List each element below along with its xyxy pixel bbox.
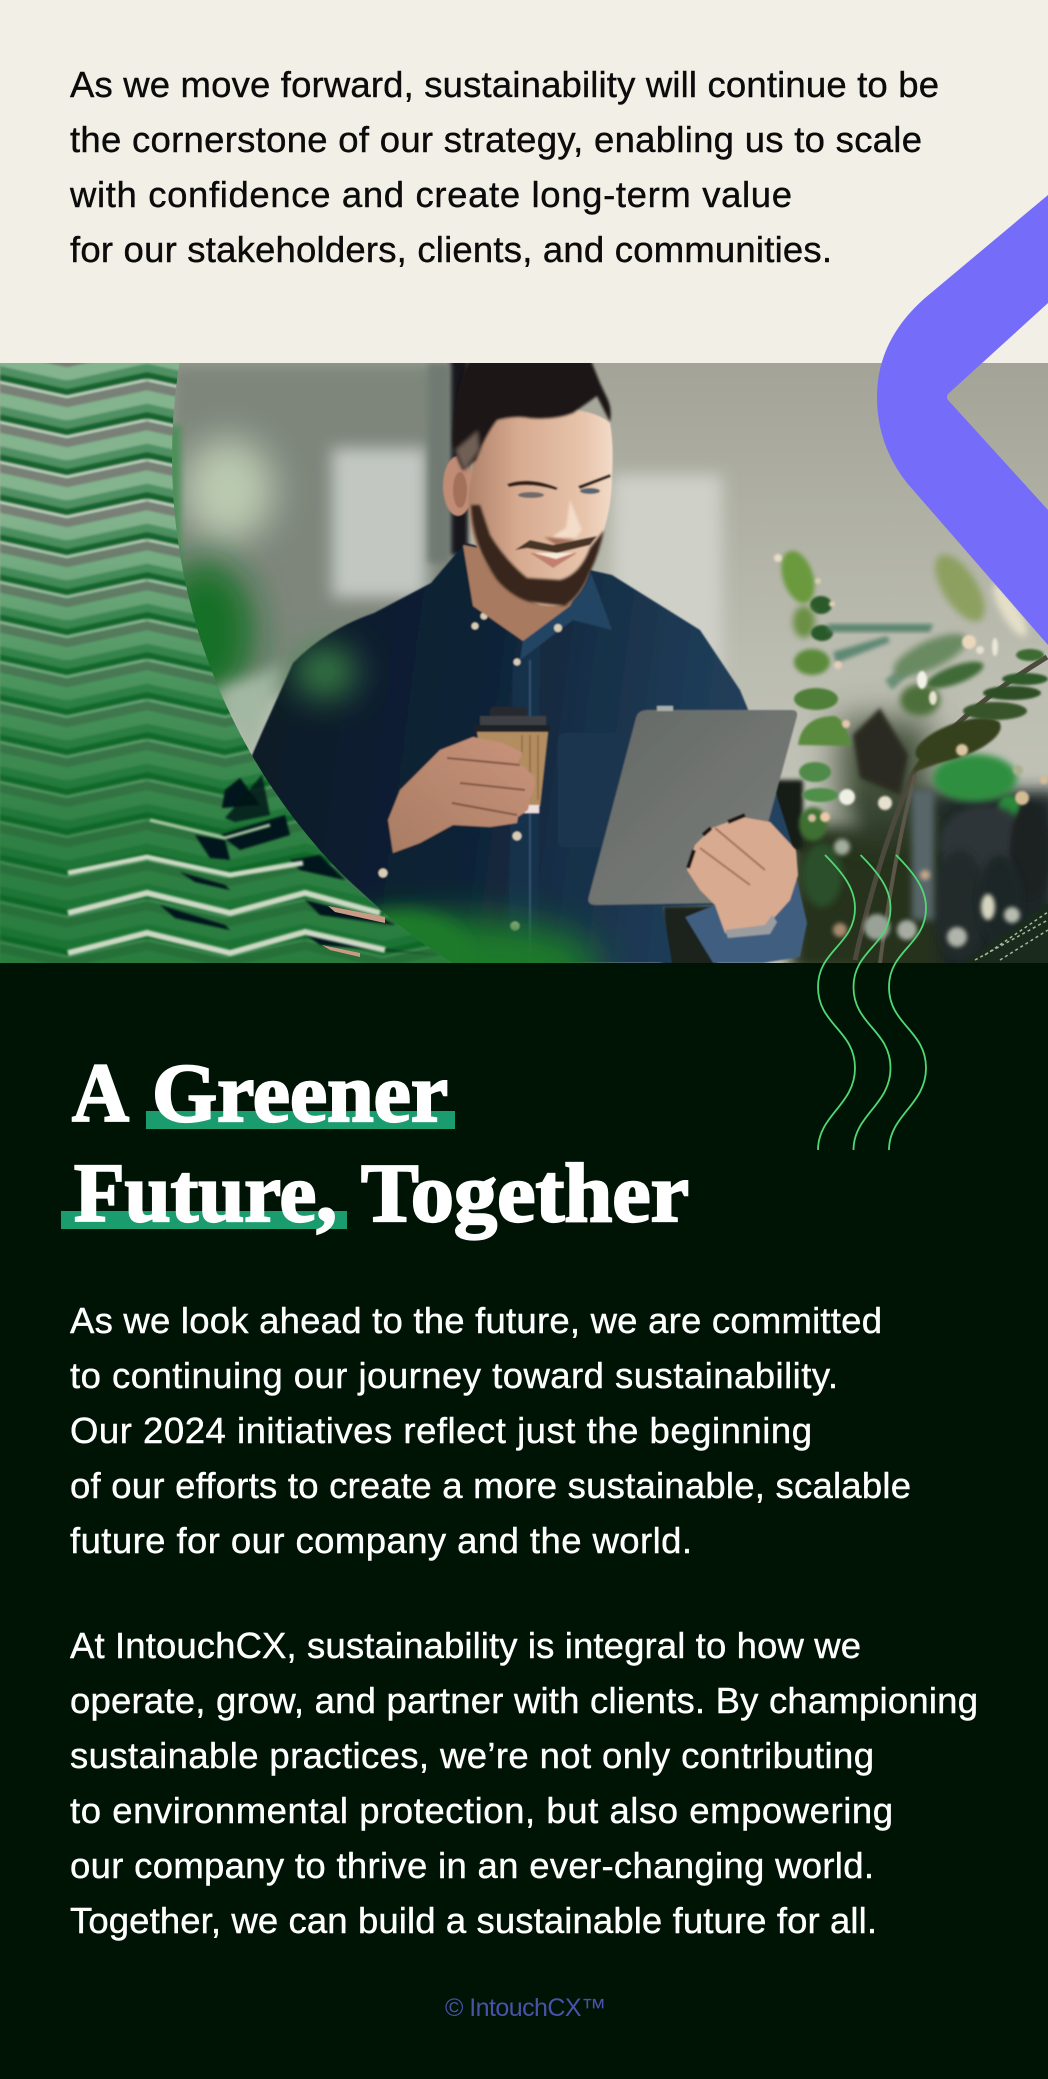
man: shirt buttons	[378, 612, 562, 930]
thin blurred blades and olive leaf	[827, 547, 1033, 690]
decorative wavy green lines	[818, 855, 926, 1150]
heading highlight: Greener	[146, 1111, 455, 1129]
patterned leaf corner	[963, 903, 1048, 963]
foreground blurred leaves	[295, 648, 600, 1013]
footer copyright: © IntouchCX™	[445, 1994, 606, 2022]
heading: A Greener Future, Together: Together	[361, 1147, 689, 1240]
text block: IntouchCX commitment paragraph: operate, grow, and partner with clients. By championing	[70, 1680, 978, 1721]
chevron peach reflections	[322, 906, 385, 957]
left column leaves	[775, 547, 852, 907]
text block: IntouchCX commitment paragraph: to environmental protection, but also empowering	[70, 1790, 893, 1831]
man: shirt placket, pocket and collar	[464, 543, 612, 940]
plant backdrop shadows	[662, 720, 1048, 980]
right sprig with leaves and stems	[853, 625, 1048, 963]
chevron cream highlights	[68, 820, 385, 953]
panel: dark green lower background	[0, 963, 1048, 2079]
text block: IntouchCX commitment paragraph: sustainable practices, we’re not only contributing	[70, 1735, 874, 1776]
blurred plants on the right	[662, 547, 1048, 980]
heading: A Greener Future, Together	[61, 1047, 689, 1240]
text block: outlook paragraph: future for our company and the world.	[70, 1520, 692, 1561]
photo: man with coffee and tablet among plants	[0, 355, 1048, 1013]
dark lower leaves	[912, 790, 1048, 960]
chevron dark gaps	[160, 775, 440, 955]
man: hair	[453, 358, 611, 472]
coffee cup	[474, 707, 550, 813]
right sleeve	[685, 880, 807, 963]
panel: cream intro background	[0, 0, 1048, 363]
man: facial features	[507, 474, 611, 568]
text block: intro paragraph	[69, 64, 939, 270]
text block: intro paragraph: for our stakeholders, clients, and communities.	[70, 229, 832, 270]
text block: IntouchCX commitment paragraph	[70, 1625, 978, 1941]
right hand	[687, 815, 798, 933]
text block: IntouchCX commitment paragraph: our company to thrive in an ever-changing world.	[70, 1845, 874, 1886]
man: figure	[250, 358, 807, 963]
text block: outlook paragraph: of our efforts to create a more sustainable, scalable	[70, 1465, 911, 1506]
man: beard	[471, 505, 604, 606]
wristwatch	[725, 915, 777, 938]
heading: A Greener Future, Together: Greener	[152, 1047, 448, 1140]
heading: A Greener Future, Together: Future,	[74, 1147, 337, 1240]
man: ear	[443, 456, 473, 516]
man: neck	[463, 545, 590, 641]
office background	[0, 355, 1048, 963]
heading: A Greener Future, Together: A	[72, 1047, 129, 1140]
blurred foliage inside circular photo	[155, 425, 285, 765]
text block: outlook paragraph	[70, 1300, 911, 1561]
bokeh highlights	[774, 554, 1048, 822]
man: face	[468, 409, 613, 606]
left hand	[388, 737, 535, 853]
heading highlight: Future	[61, 1211, 347, 1229]
text block: intro paragraph: As we move forward, sustainability will continue to be	[70, 64, 939, 105]
text block: outlook paragraph: As we look ahead to the future, we are committed	[70, 1300, 882, 1341]
text block: IntouchCX commitment paragraph: Together, we can build a sustainable future for all.	[70, 1900, 877, 1941]
green chevron facade, left	[0, 363, 452, 963]
text block: outlook paragraph: Our 2024 initiatives reflect just the beginning	[70, 1410, 812, 1451]
tablet	[588, 706, 797, 905]
man: shirt	[250, 543, 797, 963]
text block: intro paragraph: the cornerstone of our strategy, enabling us to scale	[70, 119, 922, 160]
text block: intro paragraph: with confidence and create long-term value	[69, 174, 792, 215]
purple chevron shape	[877, 195, 1048, 645]
text block: outlook paragraph: to continuing our journey toward sustainability.	[70, 1355, 838, 1396]
text block: IntouchCX commitment paragraph: At IntouchCX, sustainability is integral to how we	[70, 1625, 861, 1666]
